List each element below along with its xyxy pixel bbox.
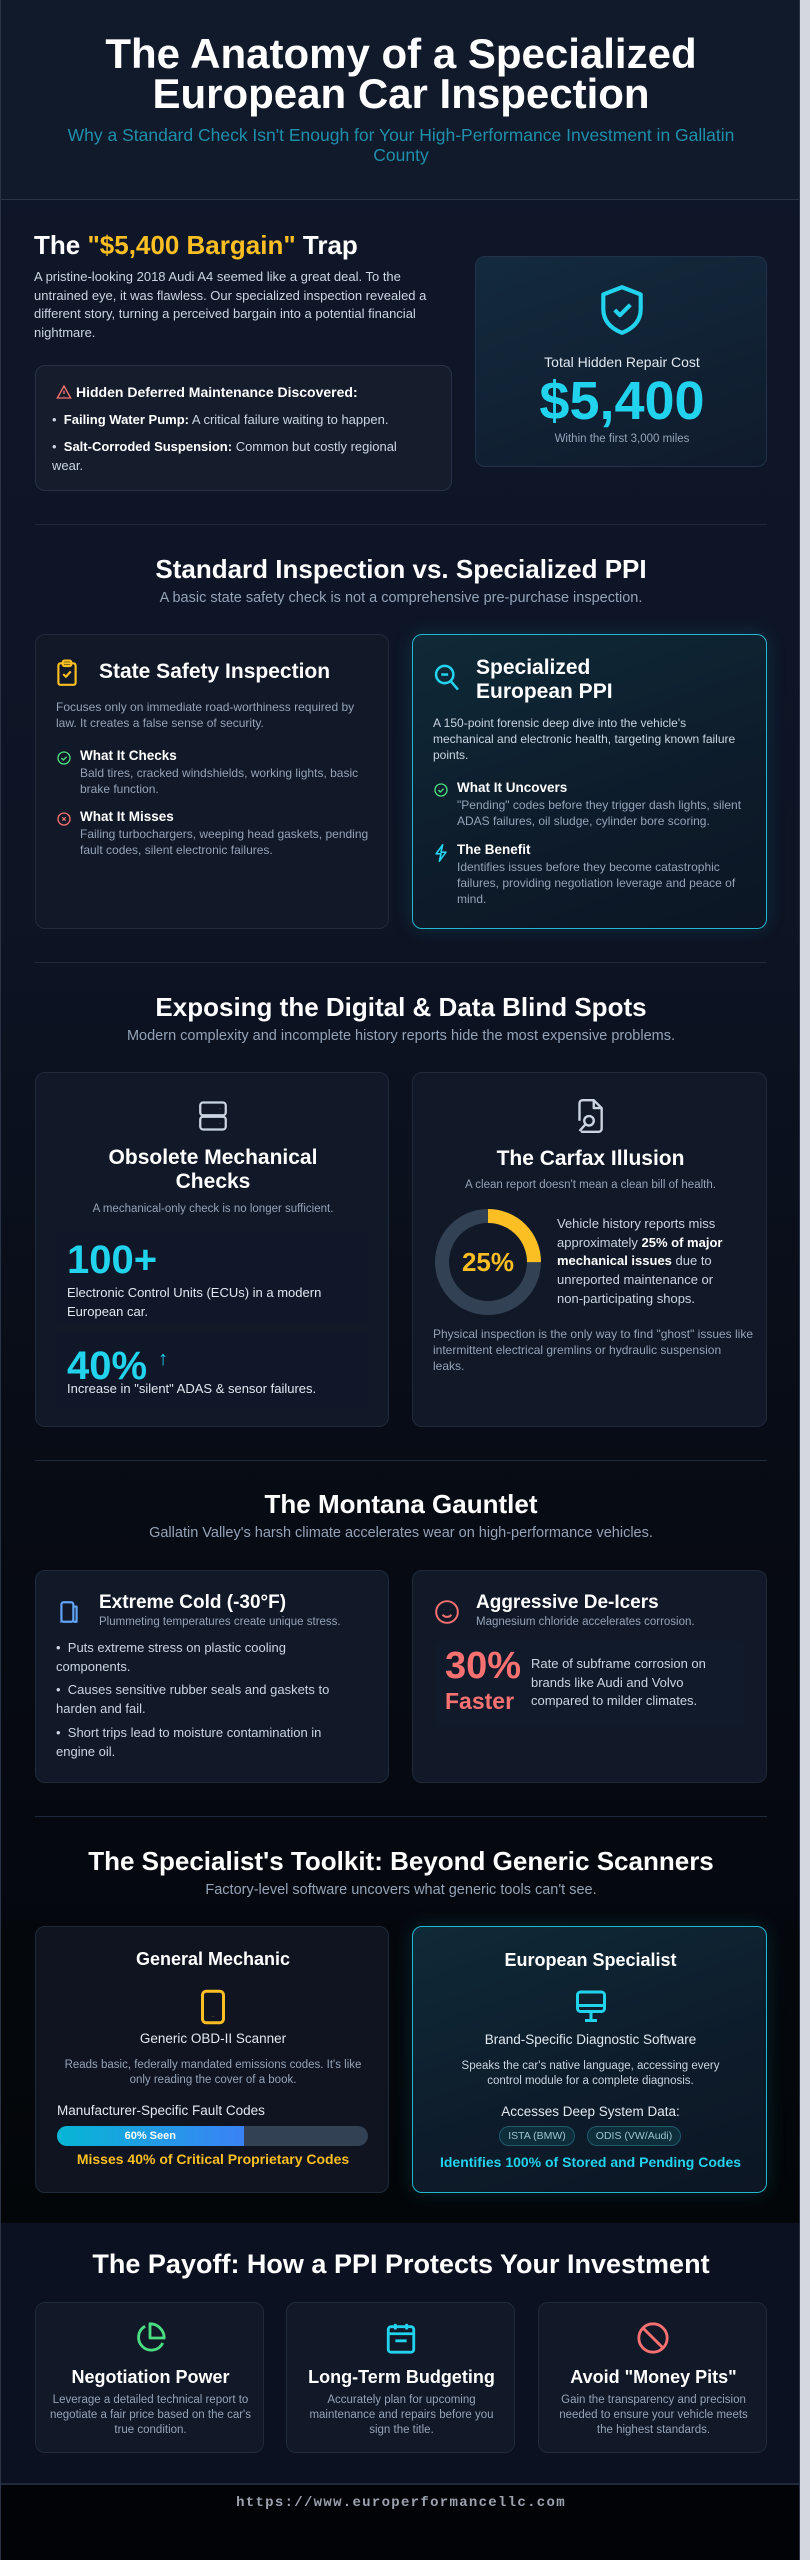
card title: Obsolete Mechanical bbox=[109, 1146, 317, 1169]
text: Speaks the car's native language, accessing every control module for a complete diagnosis. bbox=[462, 2060, 719, 2087]
section heading: bargain trap: The "$5,400 Bargain" Trap bbox=[34, 230, 358, 260]
icon: file search bbox=[578, 1099, 603, 1133]
stat: ECUs: Electronic Control Units (ECUs) in a modern European car. bbox=[67, 1285, 321, 1319]
icon: warning bbox=[56, 384, 72, 399]
title: European Car Inspection bbox=[152, 70, 650, 117]
panel: hidden cost bbox=[475, 256, 767, 467]
stat: corrosion: 30% bbox=[445, 1645, 521, 1687]
card: negotiation bbox=[35, 2302, 264, 2453]
bullets: • Puts extreme stress on plastic cooling components. bbox=[56, 1640, 286, 1674]
bullets: • Causes sensitive rubber seals and gaskets to harden and fail. bbox=[56, 1682, 329, 1716]
bar chart: 60% bbox=[57, 2126, 368, 2146]
item: misses: What It Misses bbox=[80, 809, 174, 824]
card: negotiation: Leverage a detailed technical report to negotiate a fair price based on the car's true condition. bbox=[50, 2394, 251, 2436]
heading: standard vs specialized: Standard Inspection vs. Specialized PPI bbox=[155, 554, 647, 584]
header bbox=[1, 0, 801, 200]
item: checks: Bald tires, cracked windshields, working lights, basic brake function. bbox=[80, 766, 358, 796]
stat: corrosion: Faster bbox=[445, 1688, 514, 1714]
label: Brand-Specific Diagnostic Software bbox=[485, 2032, 696, 2047]
card subtitle: A mechanical-only check is no longer sufficient. bbox=[93, 1203, 333, 1215]
panel: state safety inspection bbox=[35, 634, 389, 929]
card title: General Mechanic bbox=[136, 1949, 290, 1969]
card subtitle: Plummeting temperatures create unique stress. bbox=[99, 1616, 341, 1628]
bar label: Manufacturer-Specific Fault Codes bbox=[57, 2103, 265, 2118]
heading: toolkit: The Specialist's Toolkit: Beyond Generic Scanners bbox=[88, 1846, 714, 1876]
chart: donut 25% bbox=[435, 1209, 541, 1315]
text: story: A pristine-looking 2018 Audi A4 seemed like a great deal. To the untrained eye, it was flawless. Our specialized inspection revealed a different story, turning a perceived bargain into a potential financial nightmare. bbox=[34, 269, 426, 340]
subheading: Modern complexity and incomplete history reports hide the most expensive problems. bbox=[127, 1028, 675, 1044]
card subtitle: Magnesium chloride accelerates corrosion. bbox=[476, 1616, 695, 1628]
stat: ADAS: Increase in "silent" ADAS & sensor failures. bbox=[67, 1381, 316, 1396]
chart: donut 25%: 25% bbox=[462, 1247, 514, 1277]
callout: misses: Misses 40% of Critical Proprietary Codes bbox=[77, 2151, 349, 2167]
card subtitle: A clean report doesn't mean a clean bill of health. bbox=[465, 1179, 716, 1191]
bullets bbox=[56, 1640, 329, 1759]
panel: carfax illusion bbox=[412, 1072, 767, 1427]
bar chart: 60%: 60% Seen bbox=[125, 2130, 176, 2142]
icon: monitor bbox=[576, 1990, 606, 2022]
card title: Specialized European PPI bbox=[476, 656, 613, 703]
card: budgeting: Accurately plan for upcoming maintenance and repairs before you sign the title. bbox=[309, 2394, 494, 2436]
item: benefit: The Benefit bbox=[457, 842, 531, 857]
card title: Extreme Cold (-30°F) bbox=[99, 1592, 286, 1613]
stat: ECUs: 100+ bbox=[67, 1238, 157, 1282]
card: budgeting bbox=[286, 2302, 515, 2453]
heading: montana gauntlet: The Montana Gauntlet bbox=[264, 1489, 538, 1519]
card: money pits: Gain the transparency and precision needed to ensure your vehicle meets the highest standards. bbox=[559, 2394, 748, 2436]
icon: phone scanner bbox=[201, 1990, 225, 2024]
panel: obsolete mechanical checks bbox=[35, 1072, 389, 1427]
icon: shield bbox=[601, 285, 643, 335]
card: budgeting: Long-Term Budgeting bbox=[308, 2367, 495, 2387]
bullets: • Short trips lead to moisture contamination in engine oil. bbox=[56, 1725, 321, 1759]
item: checks: What It Checks bbox=[80, 748, 177, 763]
item: misses bbox=[57, 809, 368, 857]
bullets: • Failing Water Pump: A critical failure waiting to happen. bbox=[52, 412, 388, 427]
card title: Aggressive De-Icers bbox=[476, 1592, 659, 1613]
url: https://www.europerformancellc.com bbox=[236, 2495, 566, 2511]
title: The Anatomy of a Specialized bbox=[105, 30, 697, 77]
item: checks bbox=[57, 748, 358, 796]
card text: Focuses only on immediate road-worthiness required by law. It creates a false sense of security. bbox=[56, 700, 354, 730]
footer bbox=[1, 2483, 801, 2560]
stat: corrosion: Rate of subframe corrosion on brands like Audi and Volvo compared to milder climates. bbox=[531, 1656, 706, 1708]
item: uncovers: "Pending" codes before they trigger dash lights, silent ADAS failures, oil sludge, cylinder bore scoring. bbox=[457, 798, 741, 828]
card title: European Specialist bbox=[504, 1950, 677, 1970]
card title: State Safety Inspection bbox=[99, 660, 330, 683]
icon: clipboard bbox=[57, 660, 77, 686]
big number: $5,400 bbox=[539, 371, 705, 431]
bullets bbox=[52, 412, 397, 473]
subheading: Factory-level software uncovers what generic tools can't see. bbox=[205, 1882, 597, 1898]
section: payoff bbox=[1, 2223, 801, 2483]
label: Generic OBD-II Scanner bbox=[140, 2031, 286, 2046]
panel: hidden maintenance bbox=[35, 365, 452, 491]
item: benefit: Identifies issues before they become catastrophic failures, providing negotiation leverage and peace of mind. bbox=[457, 860, 735, 906]
stat: ADAS bbox=[56, 1332, 368, 1408]
panel: specialized european ppi bbox=[412, 634, 767, 929]
callout: identifies: Identifies 100% of Stored and Pending Codes bbox=[440, 2154, 741, 2170]
pills: ISTA (BMW) bbox=[508, 2130, 566, 2142]
panel: de-icers bbox=[412, 1570, 767, 1783]
label: deep data: Accesses Deep System Data: bbox=[501, 2104, 680, 2119]
subtitle: Why a Standard Check Isn't Enough for Your High-Performance Investment in Gallatin County bbox=[68, 125, 734, 165]
label: Total Hidden Repair Cost bbox=[544, 354, 700, 370]
stat: ECUs bbox=[56, 1231, 368, 1323]
pills bbox=[499, 2126, 681, 2146]
card title bbox=[109, 1146, 317, 1193]
icon: face bbox=[435, 1600, 459, 1624]
pills: ODIS (VW/Audi) bbox=[596, 2130, 672, 2142]
panel: extreme cold bbox=[35, 1570, 389, 1783]
card text: A 150-point forensic deep dive into the vehicle's mechanical and electronic health, targeting known failure points. bbox=[433, 716, 735, 762]
heading: blind spots: Exposing the Digital & Data Blind Spots bbox=[155, 992, 647, 1022]
bullets: • Salt-Corroded Suspension: Common but costly regional wear. bbox=[52, 439, 397, 473]
box title: Hidden Deferred Maintenance Discovered: bbox=[76, 384, 358, 400]
icon: magnifier bbox=[434, 664, 459, 690]
card: money pits bbox=[538, 2302, 767, 2453]
card title: The Carfax Illusion bbox=[497, 1147, 684, 1170]
icon: server bbox=[199, 1101, 227, 1131]
item: uncovers bbox=[434, 780, 741, 828]
item: misses: Failing turbochargers, weeping head gaskets, pending fault codes, silent electronic failures. bbox=[80, 827, 368, 857]
subheading: A basic state safety check is not a comprehensive pre-purchase inspection. bbox=[160, 590, 642, 606]
icon: thermometer/device bbox=[60, 1601, 78, 1623]
card: money pits: Avoid "Money Pits" bbox=[570, 2367, 737, 2387]
item: uncovers: What It Uncovers bbox=[457, 780, 567, 795]
stat: corrosion bbox=[435, 1641, 745, 1726]
panel: european specialist bbox=[412, 1926, 767, 2193]
heading: The Payoff: How a PPI Protects Your Investment bbox=[92, 2249, 710, 2279]
text: physical inspection: Physical inspection is the only way to find "ghost" issues like intermittent electrical gremlins or hydraulic suspension leaks. bbox=[433, 1327, 753, 1373]
subheading: Gallatin Valley's harsh climate accelerates wear on high-performance vehicles. bbox=[149, 1525, 653, 1541]
item: benefit bbox=[435, 842, 736, 906]
caption: Within the first 3,000 miles bbox=[555, 433, 689, 445]
card title: Checks bbox=[176, 1170, 250, 1193]
text: reports miss: Vehicle history reports miss approximately 25% of major mechanical issues due to unreported maintenance or non-participating shops. bbox=[557, 1216, 722, 1306]
panel: general mechanic bbox=[35, 1926, 389, 2193]
stat: ADAS: 40% ↑ bbox=[67, 1344, 168, 1388]
title bbox=[105, 30, 697, 117]
text: Reads basic, federally mandated emissions codes. It's like only reading the cover of a book. bbox=[65, 2059, 361, 2086]
card: negotiation: Negotiation Power bbox=[71, 2367, 230, 2387]
